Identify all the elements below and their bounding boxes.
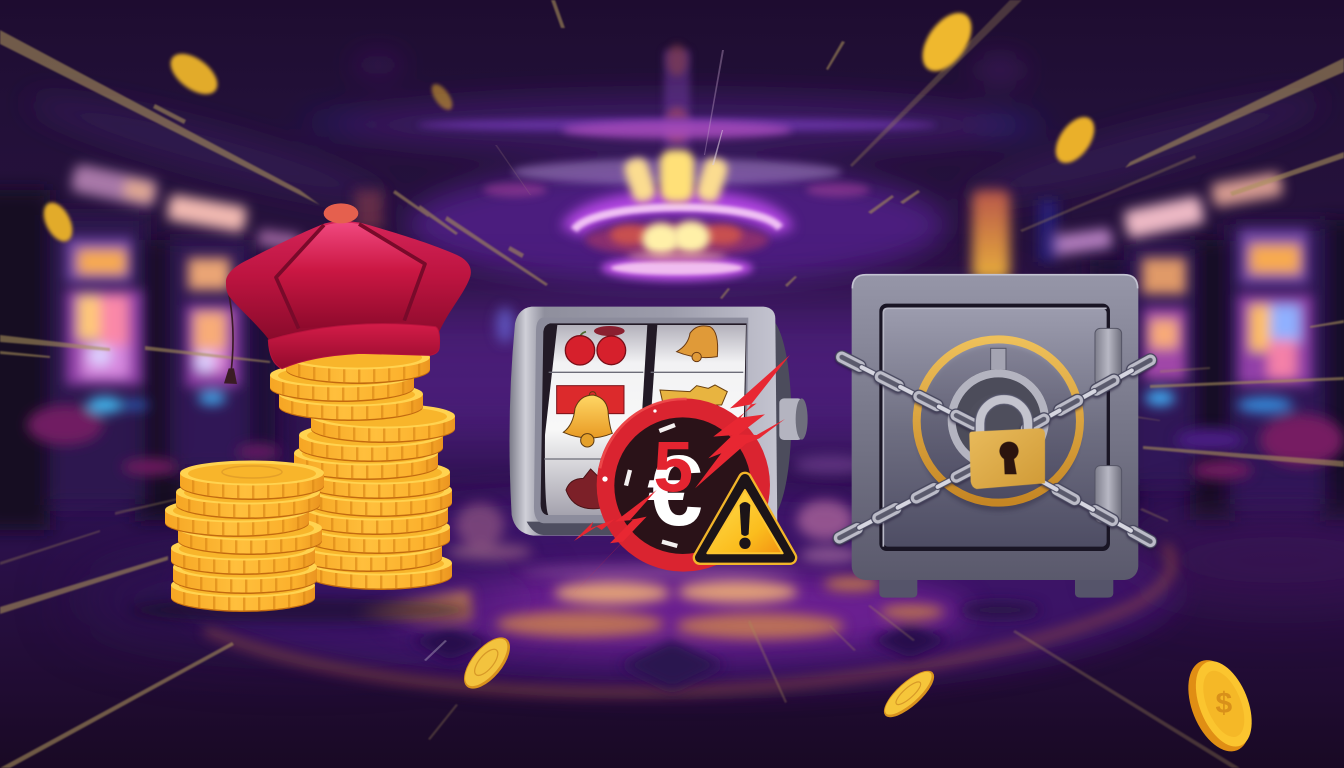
gold badge symbol xyxy=(660,385,727,405)
cherries xyxy=(565,326,626,365)
left coin stack xyxy=(165,460,324,612)
hat brim xyxy=(268,324,440,369)
floor ring xyxy=(205,545,1172,692)
reel drum body xyxy=(509,307,792,536)
safe door xyxy=(883,308,1107,547)
chain lower left xyxy=(834,463,979,543)
flying coin, lower left xyxy=(456,630,518,696)
reel window xyxy=(541,323,747,515)
chain upper left xyxy=(836,352,979,430)
padlock body xyxy=(969,428,1045,489)
right slot machines xyxy=(355,172,1344,480)
right coin stack xyxy=(270,344,455,590)
chandelier xyxy=(417,44,937,281)
shadow under stacks xyxy=(130,598,470,622)
yellow bell xyxy=(563,392,612,447)
safe body xyxy=(852,274,1138,580)
right reel xyxy=(644,325,746,515)
reel window frame xyxy=(534,318,748,523)
mid-hall purple xyxy=(330,300,1020,450)
reel lines xyxy=(544,372,743,459)
keyhole xyxy=(999,442,1019,474)
door recess xyxy=(879,304,1110,551)
side walls and dark columns xyxy=(0,190,1344,530)
left reel xyxy=(545,325,647,515)
hat crown xyxy=(226,221,471,343)
red five: 5 xyxy=(653,428,693,508)
hat knob xyxy=(324,203,358,223)
padlock xyxy=(969,399,1045,489)
flying coin, lower centre xyxy=(877,664,941,724)
chain upper right xyxy=(1021,355,1156,434)
chained safe xyxy=(834,274,1156,598)
hat front panel xyxy=(277,223,424,328)
warning triangle xyxy=(700,479,790,558)
chain lower right xyxy=(1036,476,1156,547)
safe feet xyxy=(879,577,1113,598)
flying dollar coin: $ xyxy=(1215,687,1232,720)
euro sign: € xyxy=(647,435,703,547)
dark cherry xyxy=(566,469,600,509)
poker chip with currency xyxy=(597,398,770,572)
lightning bolts xyxy=(571,355,790,597)
slot machine with warning chip xyxy=(509,307,808,597)
coin stacks and hat xyxy=(130,203,471,622)
exclamation mark xyxy=(739,502,751,549)
knob xyxy=(779,398,808,440)
chains xyxy=(834,352,1156,547)
flying coins, blurred xyxy=(38,4,1102,246)
hinges xyxy=(1095,328,1122,523)
floor tiles xyxy=(356,307,1040,690)
flying dollar coin xyxy=(1176,650,1264,760)
red seven bar xyxy=(557,386,624,414)
hat seams xyxy=(276,224,425,329)
hat cord and tassel xyxy=(224,290,237,384)
padlock shackle xyxy=(980,399,1028,438)
left slot machines xyxy=(27,163,301,475)
gold wheel xyxy=(917,339,1080,512)
red hat xyxy=(224,203,471,384)
floor xyxy=(180,490,1180,690)
orange bell xyxy=(677,326,718,362)
safe dial xyxy=(948,369,1049,471)
ceiling glow xyxy=(21,53,1329,285)
